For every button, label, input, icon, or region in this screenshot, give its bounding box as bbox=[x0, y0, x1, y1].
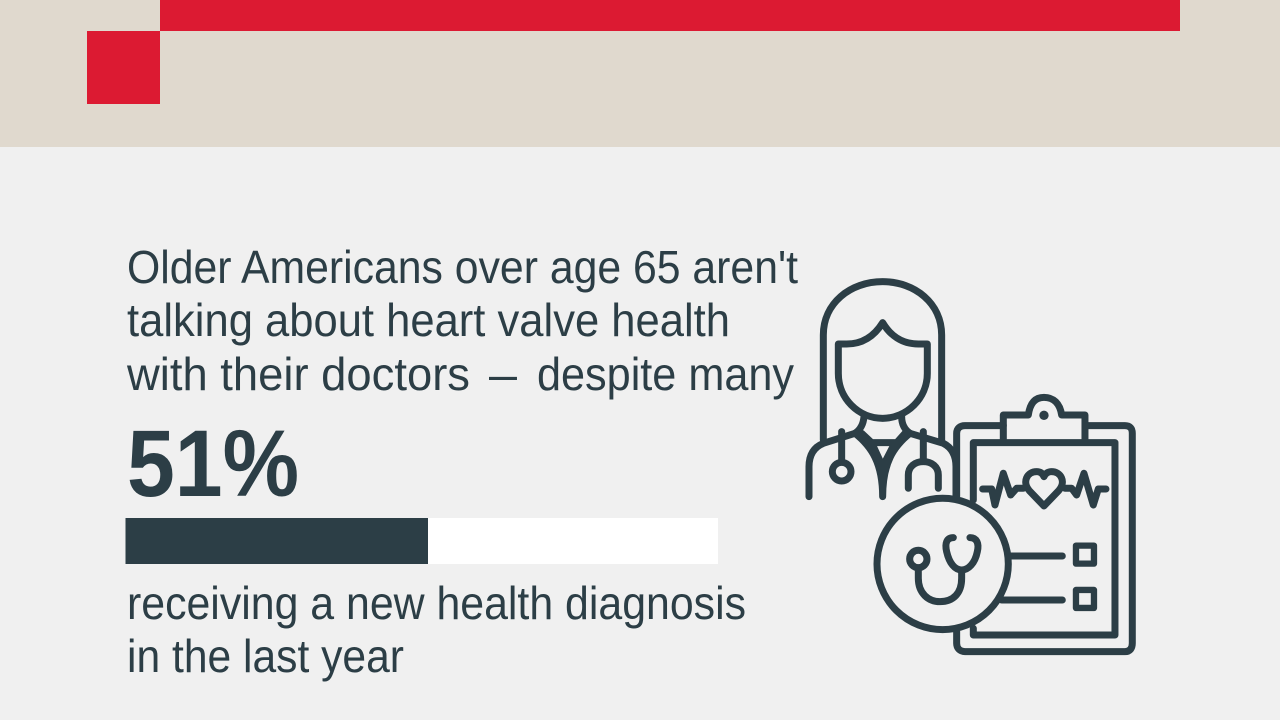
icon: doctor bbox=[809, 282, 956, 497]
checklist rows bbox=[1002, 556, 1062, 600]
icon: stethoscope in circle bbox=[877, 498, 1008, 630]
big statistic: 51%: 51% bbox=[127, 411, 299, 517]
progress bar: 51 percent bbox=[126, 518, 718, 564]
caption text: in the last year bbox=[127, 630, 404, 682]
icon: doctor with clipboard and stethoscope bbox=[809, 282, 1132, 652]
heading text: Older Americans over age 65 aren't bbox=[127, 241, 798, 293]
caption text: receiving a new health diagnosis bbox=[127, 577, 746, 629]
heading text: despite many bbox=[537, 348, 794, 400]
red horizontal bar bbox=[160, 0, 1180, 31]
icon: clipboard bbox=[957, 397, 1132, 652]
heading text: talking about heart valve health bbox=[127, 294, 730, 346]
heading text: with their doctors bbox=[126, 348, 470, 400]
panel: top beige band bbox=[0, 0, 1280, 147]
heading text: – bbox=[489, 348, 517, 400]
red square bbox=[87, 31, 160, 104]
heartbeat line with heart bbox=[983, 473, 1106, 505]
